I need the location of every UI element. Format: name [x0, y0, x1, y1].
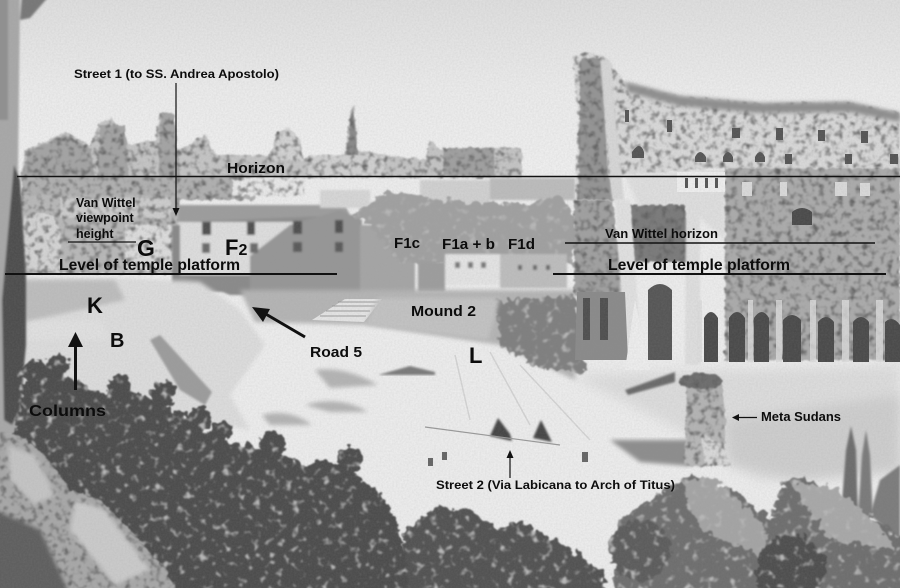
arrow: Columns — [68, 332, 83, 390]
label: F1a + b: F1a + b — [442, 237, 495, 253]
cypress trees — [841, 426, 873, 518]
label: F1d: F1d — [508, 237, 535, 253]
hill with ruins K and B — [18, 278, 265, 430]
label: Van Wittel horizon: Van Wittel horizon — [605, 227, 718, 241]
line: temple platform, left — [5, 273, 337, 275]
label: F2: F2 — [225, 235, 247, 260]
label: level of temple platform, right: Level of temple platform — [608, 257, 790, 274]
foreground trees, left — [5, 354, 410, 588]
line: viewpoint height — [68, 241, 136, 243]
Meta Sudans ruin — [679, 373, 732, 466]
light building among arches — [677, 172, 725, 192]
foreground bushes, centre — [395, 505, 612, 588]
slope, steps and Mound 2 — [240, 290, 585, 380]
trees F1 — [352, 192, 575, 265]
arrow: Meta Sudans — [732, 414, 757, 421]
label: L: L — [469, 343, 482, 368]
Colosseum — [573, 52, 900, 370]
road tracks and figures — [262, 352, 675, 466]
label: Horizon: Horizon — [227, 160, 285, 177]
houses behind trees — [320, 178, 575, 208]
storey windows and arches — [742, 182, 870, 196]
label: G: G — [137, 235, 155, 261]
arrow: Street 2 — [506, 450, 514, 478]
arrow: Street 1 — [172, 83, 180, 216]
label: level of temple platform, left: Level of temple platform — [59, 257, 240, 274]
line: horizon — [17, 176, 900, 178]
line: temple platform, right — [553, 273, 886, 275]
label: Columns: Columns — [29, 403, 106, 420]
upper windows — [625, 110, 898, 164]
label: Van Wittel viewpoint height: viewpoint — [76, 211, 134, 225]
label: Road 5: Road 5 — [310, 345, 362, 361]
label: F1c: F1c — [394, 236, 420, 252]
houses F1a, F1b, F1d — [418, 254, 567, 292]
label: Van Wittel viewpoint height — [76, 196, 136, 241]
distant hills, trees and city skyline — [20, 105, 522, 200]
label: Street 2: Street 2 (Via Labicana to Arch of Titus) — [436, 478, 675, 492]
left distant houses — [18, 195, 180, 274]
label: K: K — [87, 293, 103, 318]
foreground bushes, right — [610, 475, 900, 588]
label: Meta Sudans: Meta Sudans — [761, 410, 841, 424]
label: B: B — [110, 330, 124, 352]
label: Van Wittel viewpoint height: Van Wittel — [76, 196, 136, 210]
line: Van Wittel horizon — [565, 242, 875, 244]
arrow: Road 5 — [252, 307, 305, 337]
building F2 — [172, 205, 415, 295]
right mound — [870, 465, 900, 540]
rocks bottom left — [0, 432, 180, 588]
sky — [0, 0, 900, 180]
label: Street 1: Street 1 (to SS. Andrea Apostolo) — [74, 67, 279, 81]
ground plain — [0, 170, 900, 588]
label: Mound 2: Mound 2 — [411, 304, 476, 320]
left cypress and column edge — [0, 0, 50, 435]
label: Van Wittel viewpoint height: height — [76, 227, 114, 241]
